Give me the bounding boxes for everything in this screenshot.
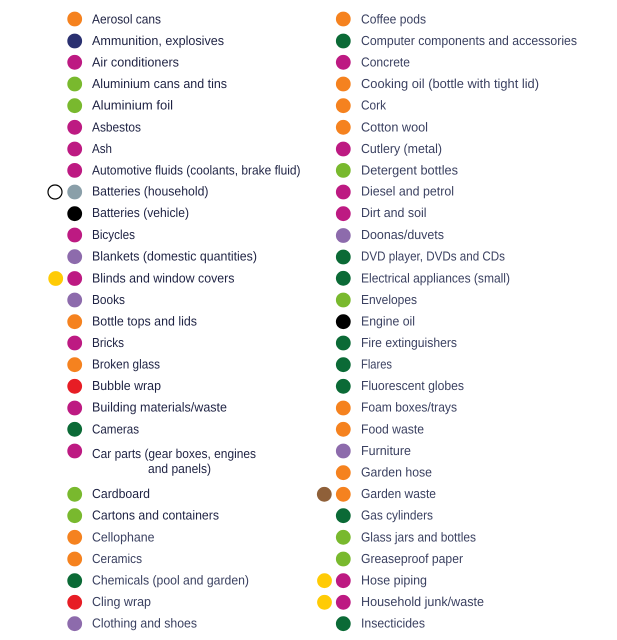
- item: Cork: Cork: [361, 97, 386, 112]
- item: Cotton wool: [336, 119, 428, 135]
- item: Coffee pods: Coffee pods: [361, 11, 426, 26]
- item: Envelopes: [336, 292, 417, 307]
- item: Clothing and shoes: Clothing and shoes: [92, 615, 197, 630]
- item: Dirt and soil: Dirt and soil: [361, 205, 427, 220]
- item: Bicycles: [67, 227, 135, 242]
- item: Cardboard: [67, 486, 150, 502]
- item: Hose piping: Hose piping: [361, 572, 427, 587]
- item: Furniture: Furniture: [361, 443, 411, 458]
- item: Aluminium foil: Aluminium foil: [92, 97, 173, 112]
- item: Bubble wrap: Bubble wrap: [92, 378, 161, 393]
- item: Household junk/waste: [317, 594, 484, 610]
- item: Cork: [336, 97, 386, 113]
- item: Cling wrap: Cling wrap: [92, 594, 151, 609]
- item: Blankets: Blankets (domestic quantities): [92, 248, 257, 263]
- item: Concrete: [336, 54, 410, 70]
- item: Batteries (household): Batteries (household): [92, 184, 208, 199]
- item: Fluorescent globes: Fluorescent globes: [361, 378, 464, 393]
- item: Bottle tops and lids: Bottle tops and lids: [92, 313, 197, 328]
- item: Chemicals: Chemicals (pool and garden): [92, 572, 249, 587]
- item: Ash: [67, 141, 112, 156]
- item: Garden hose: Garden hose: [361, 464, 432, 479]
- item: Furniture: [336, 443, 411, 458]
- item: Garden hose: [336, 464, 432, 480]
- lower left items: [67, 529, 249, 631]
- item: Bicycles: Bicycles: [92, 227, 135, 242]
- item: Blinds and window covers: Blinds and window covers: [92, 270, 235, 285]
- item: Ammunition, explosives: Ammunition, explosives: [92, 33, 224, 48]
- item: Flares: Flares: [361, 356, 392, 371]
- item: Building materials/waste: Building materials/waste: [92, 400, 227, 415]
- item: Aluminium cans and tins: Aluminium cans and tins: [92, 76, 227, 91]
- item: Ceramics: [67, 551, 142, 566]
- item: Cameras: [67, 421, 139, 437]
- item: Computer components: Computer components and accessories: [361, 33, 577, 48]
- item: Ash: Ash: [92, 141, 112, 156]
- item: Automotive fluids: Automotive fluids (coolants, brake fluid): [92, 162, 300, 177]
- item: Cooking oil: Cooking oil (bottle with tight lid): [361, 76, 539, 91]
- item: Garden waste: Garden waste: [361, 486, 436, 501]
- item: Concrete: Concrete: [361, 54, 410, 69]
- item: Cellophane: Cellophane: [92, 529, 154, 544]
- item: Cellophane: [67, 529, 154, 545]
- item: Engine oil: Engine oil: [361, 313, 415, 328]
- item: Broken glass: Broken glass: [92, 356, 160, 371]
- item: Car parts: and panels): [148, 461, 211, 476]
- item: Fire extinguishers: Fire extinguishers: [361, 335, 457, 350]
- item: Bricks: [67, 335, 124, 350]
- item: Food waste: Food waste: [361, 421, 424, 436]
- item: Cartons and containers: Cartons and containers: [92, 507, 219, 522]
- item: Gas cylinders: Gas cylinders: [361, 507, 433, 522]
- item: Asbestos: Asbestos: [92, 119, 141, 134]
- panel: right column list: [317, 11, 577, 631]
- item: Greaseproof paper: Greaseproof paper: [361, 551, 464, 566]
- item: Cameras: Cameras: [92, 421, 139, 436]
- item: Car parts: Car parts (gear boxes, engines: [92, 446, 256, 461]
- item: Engine oil: [336, 313, 415, 329]
- item: Batteries (vehicle): Batteries (vehicle): [92, 205, 189, 220]
- item: Gas cylinders: [336, 507, 433, 523]
- item: Doonas/duvets: Doonas/duvets: [361, 227, 444, 242]
- item: Detergent bottles: Detergent bottles: [361, 162, 458, 177]
- panel: left column list: [48, 11, 300, 631]
- item: Cling wrap: [67, 594, 151, 610]
- item: Food waste: [336, 421, 424, 437]
- item: Dirt and soil: [336, 205, 427, 221]
- item: Bricks: Bricks: [92, 335, 124, 350]
- item: Envelopes: Envelopes: [361, 292, 417, 307]
- item: Cotton wool: Cotton wool: [361, 119, 428, 134]
- item: Car parts: [67, 444, 256, 476]
- item: Aerosol cans: Aerosol cans: [92, 11, 161, 26]
- item: Electrical appliances: Electrical appliances (small): [361, 270, 510, 285]
- item: Glass jars and bottles: Glass jars and bottles: [361, 529, 476, 544]
- item: Books: Books: [92, 292, 125, 307]
- item: Foam boxes/trays: Foam boxes/trays: [361, 400, 457, 415]
- item: Insecticides: [336, 615, 425, 631]
- item: Broken glass: [67, 356, 160, 372]
- item: Ceramics: Ceramics: [92, 551, 142, 566]
- item: Aerosol cans: [67, 11, 161, 26]
- item: Bubble wrap: [67, 378, 161, 394]
- item: Cutlery (metal): Cutlery (metal): [361, 141, 442, 156]
- item: Hose piping: [317, 572, 427, 588]
- item: DVD player: DVD player, DVDs and CDs: [361, 248, 505, 263]
- item: Batteries (household): [48, 184, 208, 199]
- item: Air conditioners: Air conditioners: [92, 54, 179, 69]
- item: Insecticides: Insecticides: [361, 615, 425, 630]
- item: Books: [67, 292, 125, 307]
- item: Diesel and petrol: Diesel and petrol: [361, 184, 454, 199]
- item: Household junk/waste: Household junk/waste: [361, 594, 484, 609]
- item: Asbestos: [67, 119, 141, 135]
- item: Flares: [336, 356, 392, 372]
- item: Garden waste: [317, 486, 436, 502]
- item: Coffee pods: [336, 11, 426, 26]
- item: Cardboard: Cardboard: [92, 486, 150, 501]
